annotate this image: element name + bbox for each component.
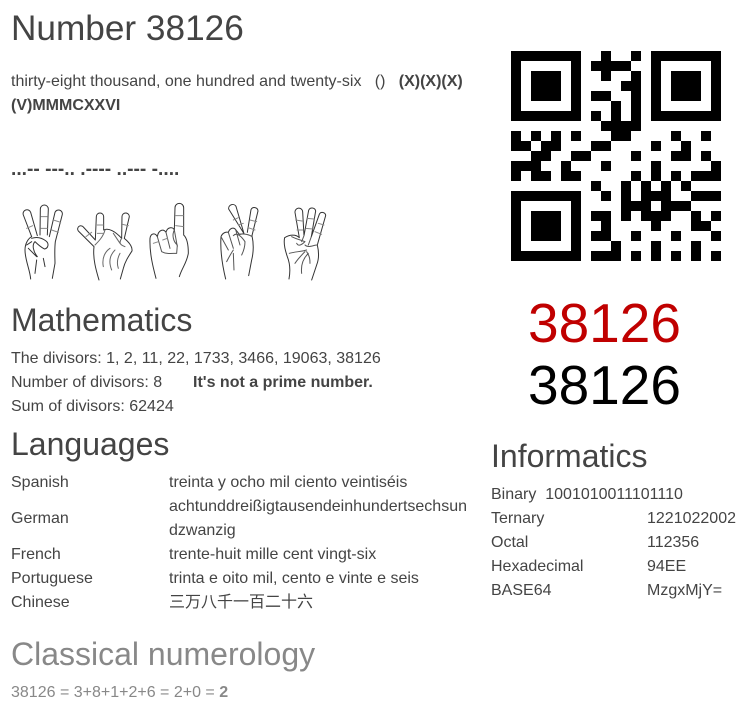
row: French [11,546,376,563]
row: Spanish [11,474,407,491]
row: BASE64: BASE64 [491,582,551,599]
row: German: achtunddreißigtausendeinhundertsechsun [169,498,467,515]
divisors text block [11,350,381,415]
icon: hand 6 [284,208,326,280]
row: Octal: 112356 [647,534,699,551]
row: Portuguese: Portuguese [11,570,93,587]
number in words and roman numerals: (V)MMMCXXVI [11,97,120,114]
row: Portuguese: trinta e oito mil, cento e vinte e seis [169,570,419,587]
QR code [511,51,721,261]
icon: hand 1 [150,203,188,278]
row: Spanish: Spanish [11,474,69,491]
heading: Languages: Languages [11,426,169,462]
row: Hexadecimal: Hexadecimal [491,558,583,575]
number in words and roman numerals [11,73,463,114]
row: French: trente-huit mille cent vingt-six [169,546,376,563]
black number: 38126 [528,354,681,416]
row: Ternary: Ternary [491,510,544,527]
heading: Informatics: Informatics [491,438,647,474]
row: German: German [11,510,69,527]
row: Portuguese [11,570,419,587]
row: Binary: Binary 1001010011101110 [491,486,683,503]
divisors text block: Number of divisors: 8 [11,374,162,391]
morse code: ...-- ---.. .---- ..--- -.... [11,159,179,180]
informatics table [491,486,736,599]
row: Octal [491,534,699,551]
row: Ternary [491,510,736,527]
row: German: dzwanzig [169,522,236,539]
row: Chinese: Chinese [11,594,70,611]
prime note: It's not a prime number. [193,374,373,391]
number in words and roman numerals: thirty-eight thousand, one hundred and twenty-six () (X)(X)(X) [11,73,463,90]
icon: hand 3 [23,205,62,279]
row: French: French [11,546,61,563]
red number: 38126 [528,292,681,354]
numerology sum: 38126 = 3+8+1+2+6 = 2+0 = 2 [11,684,228,701]
row: Hexadecimal: 94EE [647,558,686,575]
languages table [11,474,467,611]
sign language hands [22,202,326,280]
row: BASE64: MzgxMjY= [647,582,722,599]
divisors text block: The divisors: 1, 2, 11, 22, 1733, 3466, 19063, 38126 [11,350,381,367]
row: German [11,498,467,539]
row: Chinese [11,593,313,611]
heading: Mathematics: Mathematics [11,302,192,338]
icon: hand 8 [78,213,132,280]
row: Octal: Octal [491,534,528,551]
title: Number 38126 [11,9,244,48]
row: Ternary: 1221022002 [647,510,736,527]
divisors text block: Sum of divisors: 62424 [11,398,174,415]
icon: hand 2 [221,204,258,279]
row: Hexadecimal [491,558,686,575]
row: Spanish: treinta y ocho mil ciento veintiséis [169,474,407,491]
heading: Classical numerology: Classical numerology [11,636,315,672]
row: Chinese: 三万八千一百二十六 [169,594,313,611]
row: BASE64 [491,582,722,599]
